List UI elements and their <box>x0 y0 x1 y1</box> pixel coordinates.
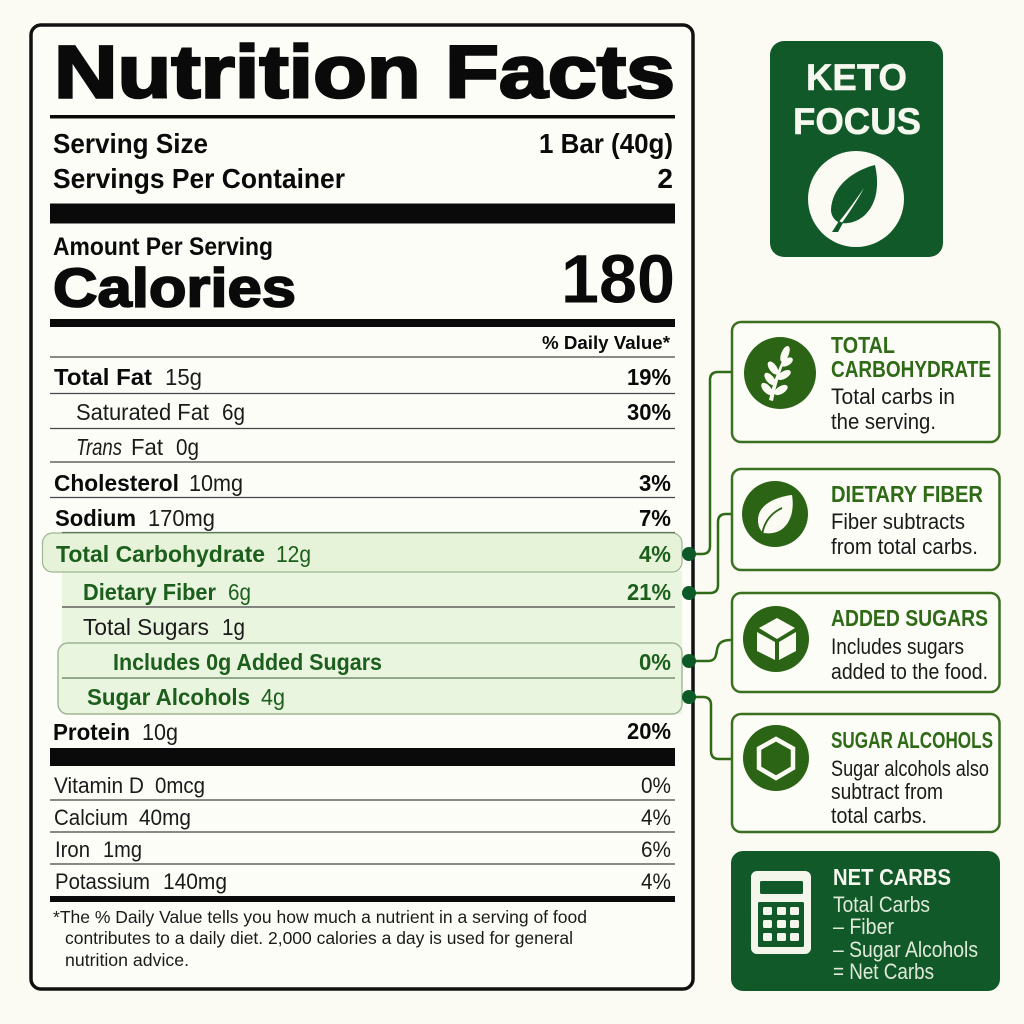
highlight: carbohydrate rows background <box>62 571 682 714</box>
card: dietary fiber: Fiber subtracts <box>831 509 965 534</box>
row: sodium: 7% <box>639 505 671 531</box>
serving size row: 1 Bar (40g) <box>539 128 673 159</box>
card: net carbs: = Net Carbs <box>833 959 934 984</box>
row: trans fat: Trans <box>76 434 122 460</box>
row: total carbohydrate <box>56 541 671 567</box>
row: total fat: 15g <box>165 364 202 390</box>
serving size row: Serving Size <box>53 128 208 159</box>
servings per container row: 2 <box>657 163 673 194</box>
connector dots <box>682 547 696 704</box>
row: total sugars: Total Sugars <box>83 614 209 640</box>
row: sodium: 170mg <box>148 505 215 531</box>
badge: keto focus <box>770 41 943 257</box>
footnote <box>53 907 587 970</box>
row: trans fat <box>76 434 199 460</box>
highlight: added sugars and sugar alcohols box <box>58 643 682 714</box>
icon: hexagon <box>743 725 809 791</box>
card: sugar alcohols: total carbs. <box>831 803 927 828</box>
servings per container row: Servings Per Container <box>53 163 345 194</box>
badge: keto focus: KETO <box>806 57 907 98</box>
row: sodium: Sodium <box>55 505 136 531</box>
row: potassium: Potassium <box>55 869 150 894</box>
row: saturated fat: 6g <box>222 399 245 425</box>
card: sugar alcohols <box>732 714 1000 832</box>
footnote: contributes to a daily diet. 2,000 calories a day is used for general <box>65 928 573 948</box>
card: net carbs: Total Carbs <box>833 892 930 917</box>
row: trans fat: Fat <box>131 434 164 460</box>
row: potassium: 140mg <box>163 869 227 894</box>
row: cholesterol: 10mg <box>189 470 243 496</box>
serving size row <box>53 128 673 159</box>
card: added sugars <box>732 593 1000 692</box>
card: dietary fiber: DIETARY FIBER <box>831 481 983 507</box>
card: added sugars: Includes sugars <box>831 634 964 659</box>
connector: sugar alcohols <box>689 697 731 759</box>
row: vitamin d: 0% <box>641 773 671 798</box>
card: total carbohydrate: CARBOHYDRATE <box>831 356 991 382</box>
calories label: Calories <box>53 256 296 318</box>
row: iron: 6% <box>641 837 671 862</box>
card: net carbs: – Sugar Alcohols <box>833 937 978 962</box>
icon: wheat <box>744 337 816 409</box>
card: total carbohydrate: Total carbs in <box>831 384 955 409</box>
row: saturated fat: 30% <box>627 399 671 425</box>
servings per container row <box>53 163 673 194</box>
panel: nutrition label <box>31 25 693 989</box>
title: Nutrition Facts <box>54 30 675 114</box>
row: calcium: Calcium <box>54 805 128 830</box>
row: total fat: 19% <box>627 364 671 390</box>
connector: total carbohydrate <box>689 372 731 554</box>
row: sugar alcohols: 4g <box>261 684 285 710</box>
row: potassium <box>55 869 671 894</box>
row: dietary fiber: 6g <box>228 579 251 605</box>
row: calcium: 40mg <box>139 805 191 830</box>
calories value: 180 <box>561 240 675 318</box>
row: added sugars: Includes 0g Added Sugars <box>113 649 382 675</box>
row: protein <box>53 718 671 745</box>
row: protein: 20% <box>627 718 671 744</box>
row: total fat <box>54 364 671 390</box>
connector: added sugars <box>689 640 731 661</box>
card: added sugars: added to the food. <box>831 659 988 684</box>
row: sugar alcohols: Sugar Alcohols <box>87 684 250 710</box>
row: vitamin d: Vitamin D <box>54 773 144 798</box>
badge: keto focus: FOCUS <box>793 101 921 142</box>
row: iron: 1mg <box>103 837 142 862</box>
row: potassium: 4% <box>641 869 671 894</box>
row: calcium <box>54 805 671 830</box>
row: dietary fiber: 21% <box>627 579 671 605</box>
card: added sugars: ADDED SUGARS <box>831 605 988 631</box>
card: net carbs: – Fiber <box>833 914 894 939</box>
row: added sugars <box>113 649 671 675</box>
row: added sugars: 0% <box>639 649 671 675</box>
row: saturated fat: Saturated Fat <box>76 399 210 425</box>
icon: sugar cube <box>743 606 809 672</box>
icon: leaf <box>742 481 808 547</box>
card: total carbohydrate: TOTAL <box>831 332 895 358</box>
card: total carbohydrate: the serving. <box>831 409 936 434</box>
row: protein: 10g <box>142 719 178 745</box>
card: sugar alcohols: subtract from <box>831 779 943 804</box>
row: iron <box>55 837 671 862</box>
row: total carbohydrate: 12g <box>276 541 311 567</box>
row: iron: Iron <box>55 837 90 862</box>
card: net carbs <box>731 851 1000 991</box>
card: sugar alcohols: Sugar alcohols also <box>831 756 989 781</box>
connector: dietary fiber <box>689 514 731 593</box>
amount per serving: Amount Per Serving <box>53 233 273 261</box>
card: dietary fiber <box>732 469 1000 570</box>
footnote: nutrition advice. <box>65 950 189 970</box>
card: dietary fiber: from total carbs. <box>831 534 978 559</box>
card: net carbs: NET CARBS <box>833 864 951 890</box>
highlight: total carbohydrate row <box>42 533 682 572</box>
row: vitamin d: 0mcg <box>155 773 205 798</box>
row: protein: Protein <box>53 719 130 745</box>
footnote: *The % Daily Value tells you how much a nutrient in a serving of food <box>53 907 587 927</box>
daily value header: % Daily Value* <box>542 333 670 353</box>
row: saturated fat <box>76 399 671 425</box>
row: total carbohydrate: 4% <box>639 541 671 567</box>
row: dietary fiber <box>83 579 671 605</box>
icon: leaf in circle <box>808 151 904 247</box>
icon: calculator <box>751 871 811 954</box>
row: total carbohydrate: Total Carbohydrate <box>56 541 265 567</box>
row: sodium <box>55 505 671 531</box>
row: cholesterol <box>54 470 671 496</box>
row: trans fat: 0g <box>176 434 199 460</box>
row: vitamin d <box>54 773 671 798</box>
row: cholesterol: 3% <box>639 470 671 496</box>
row: total sugars: 1g <box>222 614 245 640</box>
card: total carbohydrate <box>732 322 1000 442</box>
row: calcium: 4% <box>641 805 671 830</box>
row: total fat: Total Fat <box>54 364 152 390</box>
row: cholesterol: Cholesterol <box>54 470 179 496</box>
row: dietary fiber: Dietary Fiber <box>83 579 216 605</box>
